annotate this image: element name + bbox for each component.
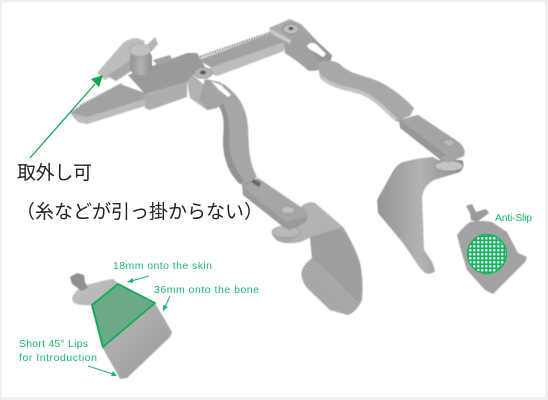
label: removable: 取外し可: [17, 162, 92, 184]
label: short lips: for Introduction: [19, 352, 97, 364]
label: anti-slip: Anti-Slip: [495, 212, 532, 224]
arrow: removable part: [30, 75, 103, 158]
left link: [242, 178, 307, 230]
right link: [399, 115, 464, 163]
central body: [128, 53, 214, 110]
arrow: 36mm onto the bone: [163, 296, 170, 311]
anti-slip circle highlight: [468, 234, 506, 274]
bottom blade photo: [70, 273, 172, 379]
right blade: [377, 146, 465, 274]
green quad highlight: skin contact area: [92, 284, 155, 347]
label: does not snag threads: （糸などが引っ掛からない）: [16, 201, 263, 223]
right arm: [318, 61, 414, 122]
label: short lips: Short 45° Lips: [19, 338, 88, 350]
label: 36mm onto the bone: 36mm onto the bone: [154, 284, 259, 296]
arrow: short lips: [88, 366, 117, 376]
anti-slip blade photo: [457, 204, 527, 294]
arrow: 18mm onto the skin: [127, 276, 149, 283]
retractor instrument: [70, 19, 527, 379]
left blade: [272, 202, 363, 315]
removable clamp plate: [97, 37, 158, 81]
rack bar: [198, 32, 284, 76]
left joint: [194, 68, 234, 110]
label: 18mm onto the skin: 18mm onto the skin: [113, 260, 212, 272]
left arm: [214, 84, 257, 186]
lower jaw: [70, 84, 148, 124]
right clamp block: [269, 19, 332, 71]
